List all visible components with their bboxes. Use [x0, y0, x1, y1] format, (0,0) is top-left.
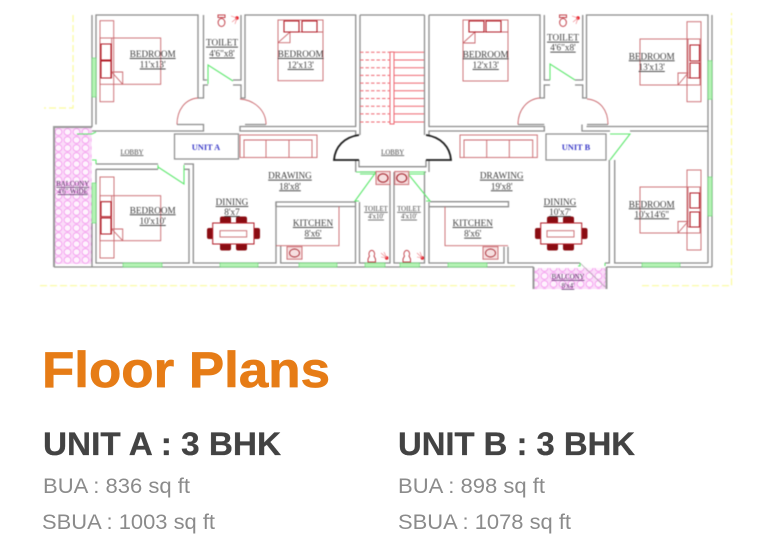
room labels: 4'6"x8' — [550, 43, 576, 53]
balcony labels: BALCONY — [56, 181, 89, 188]
room labels: 8'x6' — [304, 229, 322, 239]
unit A label box — [174, 134, 238, 159]
room door swings — [177, 98, 608, 124]
left balcony — [54, 127, 92, 267]
room labels: 10'x14'6" — [634, 209, 669, 219]
kitchen counters — [276, 206, 508, 246]
front balcony — [534, 263, 606, 289]
unit B details: BUA : 898 sq ft — [398, 475, 545, 498]
unit B label box: UNIT B — [562, 143, 591, 152]
unit B details — [398, 426, 636, 534]
bed: bedroom 12x13 unit B — [463, 20, 508, 81]
room labels: DINING — [216, 197, 249, 207]
lobby doors — [334, 135, 451, 160]
room labels: 12'x13' — [473, 60, 499, 70]
balcony labels — [56, 181, 585, 290]
small labels: TOILET — [397, 206, 422, 213]
balcony labels: 8'x4' — [562, 283, 574, 290]
room labels: KITCHEN — [453, 218, 493, 228]
bed: bedroom 13x13 — [640, 22, 701, 102]
room labels: 8'x7 — [224, 207, 240, 217]
toilet fixtures — [218, 15, 566, 262]
room labels: 19'x8' — [491, 181, 513, 191]
small labels: LOBBY — [381, 149, 404, 156]
dining table unit A — [207, 216, 260, 250]
unit B details: SBUA : 1078 sq ft — [398, 511, 571, 534]
room labels: TOILET — [206, 38, 238, 48]
plot boundary — [40, 13, 732, 286]
room labels: DRAWING — [480, 171, 524, 181]
room labels: 13'x13' — [639, 62, 665, 72]
floor plan drawing — [40, 13, 732, 290]
balcony labels: BALCONY — [552, 274, 585, 281]
room labels: BEDROOM — [463, 49, 509, 59]
bed: bedroom 10x14'6" — [640, 170, 701, 250]
title: Floor Plans — [42, 342, 330, 398]
bed: bedroom 10x10 — [100, 177, 161, 258]
unit A details: BUA : 836 sq ft — [43, 475, 190, 498]
staircase — [360, 52, 424, 124]
green doors — [77, 64, 630, 266]
dining table unit B — [535, 216, 588, 250]
unit B label box — [546, 134, 606, 160]
room labels: BEDROOM — [130, 49, 176, 59]
room labels: DRAWING — [268, 171, 312, 181]
balcony labels: 4'6" WIDE — [58, 188, 88, 195]
room labels: 18'x8' — [279, 181, 301, 191]
small labels: LOBBY — [120, 149, 144, 156]
unit A details: UNIT A : 3 BHK — [43, 426, 282, 462]
wash basins — [287, 172, 498, 259]
small labels: TOILET — [364, 206, 389, 213]
room labels: 4'6"x8' — [209, 48, 235, 58]
bed: bedroom 12x13 unit A — [278, 20, 323, 81]
room labels: BEDROOM — [130, 205, 176, 215]
room labels: KITCHEN — [293, 218, 334, 228]
small labels: 4'x10' — [401, 214, 417, 221]
room labels: BEDROOM — [278, 49, 324, 59]
unit B details: UNIT B : 3 BHK — [398, 426, 636, 462]
sofa unit A — [240, 135, 317, 158]
green windows — [92, 58, 712, 267]
room labels: 8'x6' — [464, 229, 482, 239]
room labels: 10'x7' — [549, 207, 571, 217]
room labels: 12'x13' — [288, 60, 314, 70]
unit A details: SBUA : 1003 sq ft — [42, 511, 215, 534]
room labels: TOILET — [547, 33, 579, 43]
small labels — [120, 149, 422, 221]
bed: bedroom 11x13 — [100, 21, 161, 102]
small labels: 4'x10' — [368, 214, 384, 221]
room labels: 11'x13' — [140, 60, 166, 70]
room labels: 10'x10' — [140, 216, 166, 226]
room labels — [130, 33, 675, 239]
unit A details — [42, 426, 282, 534]
room labels: DINING — [544, 197, 577, 207]
shower points — [231, 16, 580, 260]
unit A label box: UNIT A — [192, 143, 220, 152]
walls — [54, 15, 712, 267]
room labels: BEDROOM — [629, 51, 675, 61]
sofa unit B — [460, 135, 537, 158]
room labels: BEDROOM — [629, 199, 675, 209]
